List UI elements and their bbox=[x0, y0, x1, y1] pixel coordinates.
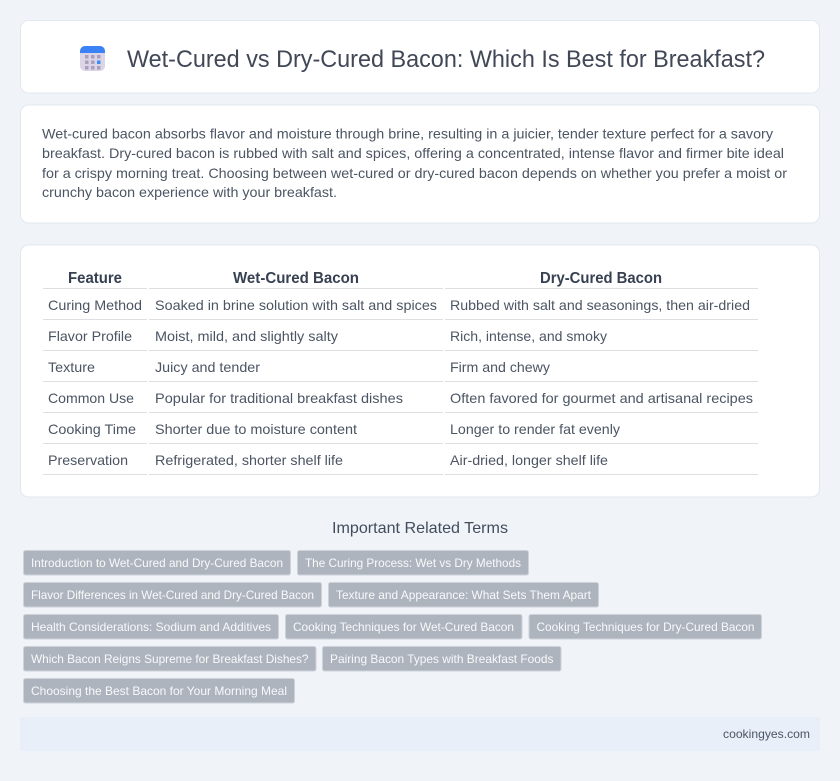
panel: description bbox=[20, 105, 820, 223]
row: cooking time: Longer to render fat evenly bbox=[450, 421, 620, 437]
tag bbox=[322, 646, 561, 671]
tag: Introduction to Wet-Cured and Dry-Cured Bacon bbox=[31, 556, 283, 570]
row: preservation: Preservation bbox=[48, 452, 128, 468]
row: curing method: Rubbed with salt and seasonings, then air-dried bbox=[450, 297, 750, 313]
description text bbox=[42, 126, 787, 200]
row: texture: Juicy and tender bbox=[155, 359, 260, 375]
description text: Wet-cured bacon absorbs flavor and moisture through brine, resulting in a juicier, tender texture perfect for a savory bbox=[42, 126, 773, 142]
title: Wet-Cured vs Dry-Cured Bacon: Which Is Best for Breakfast? bbox=[127, 46, 765, 73]
row: flavor profile: Flavor Profile bbox=[48, 328, 132, 344]
row: cooking time: Shorter due to moisture content bbox=[155, 421, 357, 437]
table header: Wet-Cured Bacon bbox=[233, 270, 359, 287]
tag: Texture and Appearance: What Sets Them Apart bbox=[336, 588, 592, 602]
tag: Choosing the Best Bacon for Your Morning Meal bbox=[31, 684, 287, 698]
tag: Flavor Differences in Wet-Cured and Dry-Cured Bacon bbox=[31, 588, 314, 602]
table header: Feature bbox=[68, 270, 122, 287]
tag bbox=[286, 614, 522, 639]
related terms tags bbox=[24, 550, 762, 703]
row: curing method bbox=[48, 297, 750, 313]
row: preservation: Air-dried, longer shelf life bbox=[450, 452, 608, 468]
tag: The Curing Process: Wet vs Dry Methods bbox=[305, 556, 521, 570]
tag: Which Bacon Reigns Supreme for Breakfast Dishes? bbox=[31, 652, 309, 666]
tag: Cooking Techniques for Dry-Cured Bacon bbox=[536, 620, 754, 634]
footer bbox=[20, 717, 820, 751]
tag bbox=[529, 614, 762, 639]
description text: for a crispy morning treat. Choosing between wet-cured or dry-cured bacon depends on whether you prefer a moist or bbox=[42, 165, 787, 181]
tag: Cooking Techniques for Wet-Cured Bacon bbox=[293, 620, 514, 634]
description text: crunchy bacon experience with your breakfast. bbox=[42, 184, 337, 200]
row: curing method: Soaked in brine solution with salt and spices bbox=[155, 297, 437, 313]
row: cooking time: Cooking Time bbox=[48, 421, 136, 437]
footer source text: cookingyes.com bbox=[723, 727, 810, 741]
row: common use: Popular for traditional breakfast dishes bbox=[155, 390, 403, 406]
panel: comparison table bbox=[20, 245, 820, 497]
row: flavor profile: Rich, intense, and smoky bbox=[450, 328, 607, 344]
tag bbox=[24, 582, 322, 607]
tag bbox=[24, 678, 294, 703]
description text: breakfast. Dry-cured bacon is rubbed with salt and spices, offering a concentrated, intense flavor and firmer bite ideal bbox=[42, 145, 784, 161]
row: cooking time bbox=[48, 421, 620, 437]
table header bbox=[68, 270, 662, 287]
tag bbox=[24, 614, 278, 639]
tag bbox=[24, 550, 290, 575]
row: preservation bbox=[48, 452, 608, 468]
tag: Pairing Bacon Types with Breakfast Foods bbox=[330, 652, 554, 666]
row: preservation: Refrigerated, shorter shelf life bbox=[155, 452, 343, 468]
tag bbox=[24, 646, 316, 671]
row: common use: Common Use bbox=[48, 390, 134, 406]
heading: important related terms: Important Related Terms bbox=[332, 520, 508, 537]
tag bbox=[298, 550, 528, 575]
row: flavor profile: Moist, mild, and slightly salty bbox=[155, 328, 338, 344]
tag: Health Considerations: Sodium and Additives bbox=[31, 620, 271, 634]
row: flavor profile bbox=[48, 328, 607, 344]
tag bbox=[328, 582, 598, 607]
row: common use: Often favored for gourmet and artisanal recipes bbox=[450, 390, 753, 406]
row: texture: Firm and chewy bbox=[450, 359, 550, 375]
row: curing method: Curing Method bbox=[48, 297, 142, 313]
row: texture: Texture bbox=[48, 359, 95, 375]
row: common use bbox=[48, 390, 753, 406]
row: texture bbox=[48, 359, 550, 375]
table header: Dry-Cured Bacon bbox=[540, 270, 662, 287]
icon: calendar bbox=[80, 46, 105, 71]
panel: title card bbox=[20, 20, 820, 93]
